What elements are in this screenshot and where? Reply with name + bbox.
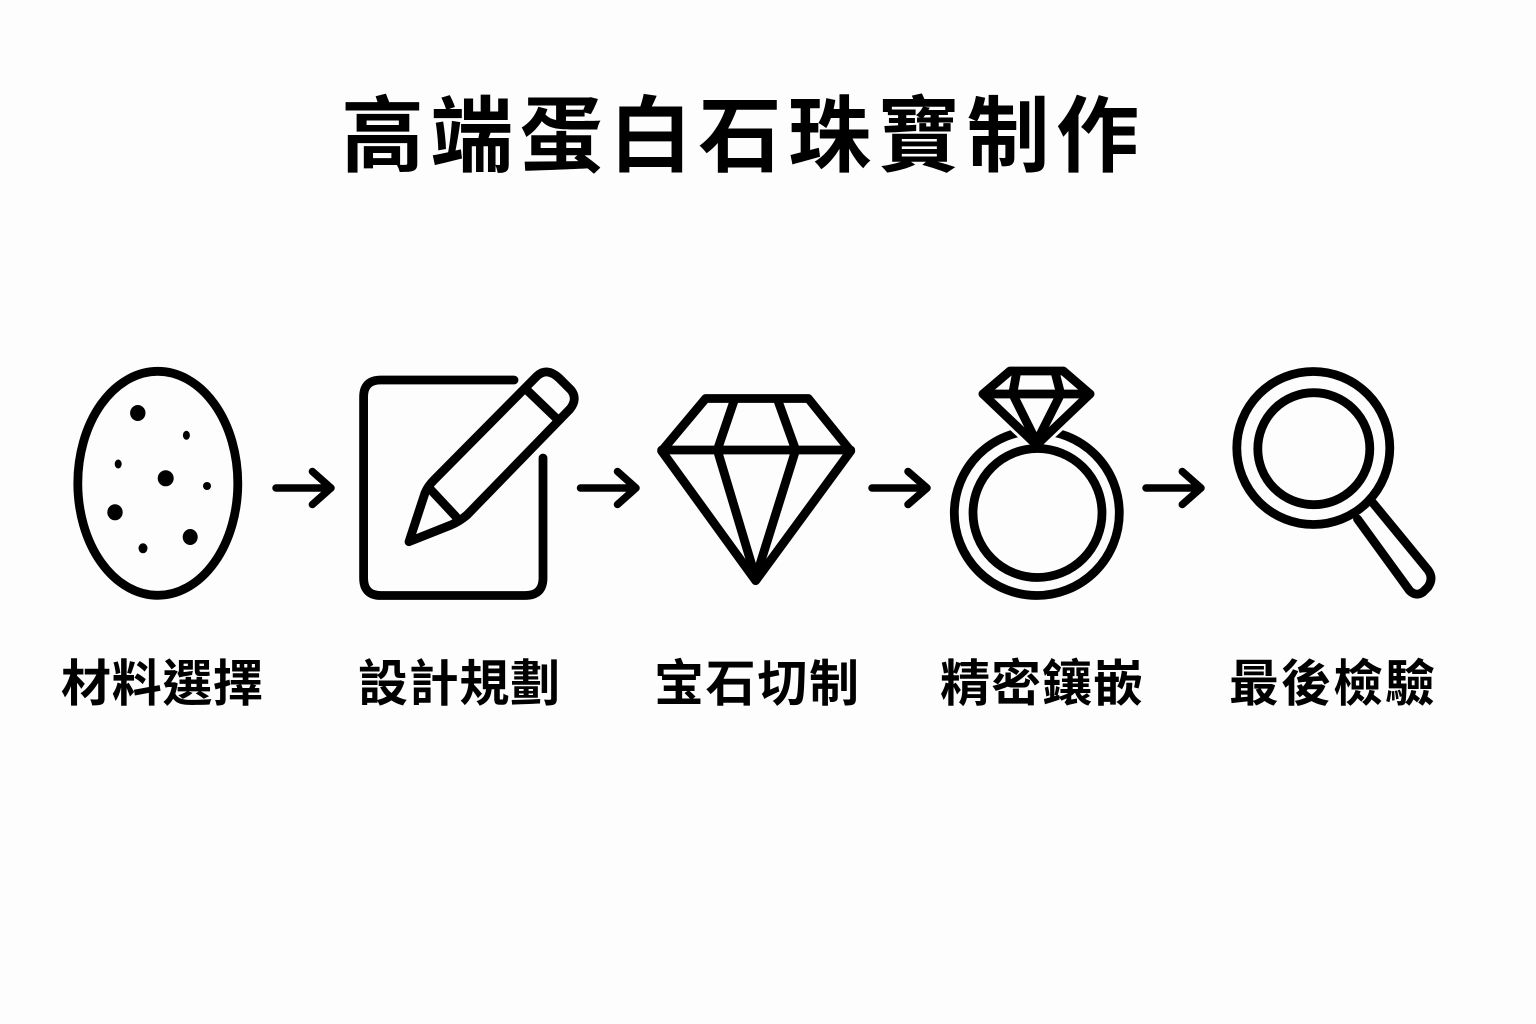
icon: diamond ring	[954, 370, 1119, 596]
label: step 3: 宝石切制	[654, 656, 859, 712]
icon: magnifying glass	[1237, 372, 1431, 594]
icon: notepad and pencil	[364, 372, 574, 596]
icon: opal egg with speckles	[78, 371, 238, 595]
arrow: step 2 to step 3	[580, 472, 636, 504]
label: step 4: 精密鑲嵌	[940, 656, 1143, 712]
label: step 2: 設計規劃	[358, 656, 560, 712]
label: step 5: 最後檢驗	[1229, 656, 1435, 712]
title: 高端蛋白石珠寶制作	[341, 90, 1139, 183]
arrow: step 3 to step 4	[872, 472, 927, 504]
icon: cut diamond	[662, 398, 851, 581]
arrow: step 4 to step 5	[1146, 472, 1201, 504]
label: step 1: 材料選擇	[61, 656, 263, 712]
arrow: step 1 to step 2	[276, 472, 331, 504]
step labels	[61, 656, 1435, 712]
